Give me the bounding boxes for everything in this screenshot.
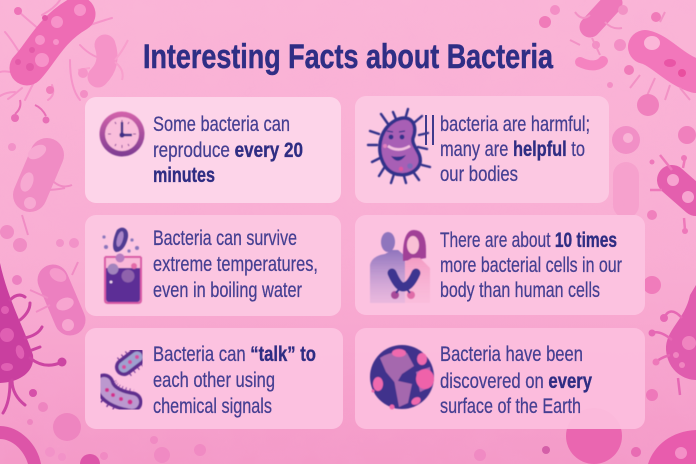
text block [153, 343, 316, 418]
icon: globe with bacteria [370, 345, 434, 410]
icon: inequality bars [426, 115, 433, 145]
title: Interesting Facts about Bacteria [143, 38, 554, 76]
text block: many are helpful to [440, 138, 585, 161]
icon: man and woman with bacterium [370, 230, 430, 303]
bacterium: left mid [0, 100, 79, 252]
text block: even in boiling water [153, 279, 302, 302]
text block: each other using [153, 369, 275, 392]
bacterium: bottom left magenta [0, 263, 81, 464]
bacterium: top right [539, 3, 661, 88]
bacterium: top left [0, 0, 112, 100]
text block: Some bacteria can [153, 113, 290, 136]
text block [440, 343, 592, 418]
text block [153, 113, 303, 187]
icon: two bacteria [104, 355, 139, 404]
panel: ten times more bacterial cells [355, 215, 645, 315]
text block [440, 229, 622, 302]
bacterium: right upper [630, 12, 696, 100]
text block: Bacteria can survive [153, 227, 297, 250]
text block: our bodies [440, 163, 518, 186]
bacterium: top centre-left [78, 40, 128, 80]
icon: smiling bacterium [368, 109, 430, 183]
text block: more bacterial cells in our [440, 254, 622, 277]
text block: Bacteria can “talk” to [153, 343, 316, 366]
bacterium: bottom spots [80, 408, 641, 464]
bacterium: left lower [12, 262, 78, 331]
icon: bacterium over boiling beaker [102, 228, 141, 303]
text block: bacteria are harmful; [440, 113, 590, 136]
panel: extreme temperatures [85, 215, 341, 316]
text block: chemical signals [153, 395, 272, 418]
text block: Bacteria have been [440, 343, 583, 366]
text block [153, 227, 318, 302]
text block: reproduce every 20 [153, 139, 303, 162]
panel: bacteria talk [85, 328, 343, 429]
text block: body than human cells [440, 279, 600, 302]
panel: reproduce every 20 minutes [85, 97, 341, 203]
bacterium: right lower [631, 276, 696, 464]
text block: minutes [153, 164, 215, 187]
panel: not all bacteria are harmful [355, 96, 609, 203]
text block: surface of the Earth [440, 395, 581, 418]
bacterium: right mid [612, 94, 696, 234]
text block: There are about 10 times [440, 229, 617, 252]
text block: discovered on every [440, 370, 592, 393]
panel: every surface of Earth [355, 328, 645, 429]
icon: clock [100, 112, 144, 156]
text block [440, 113, 590, 186]
text block: extreme temperatures, [153, 253, 318, 276]
